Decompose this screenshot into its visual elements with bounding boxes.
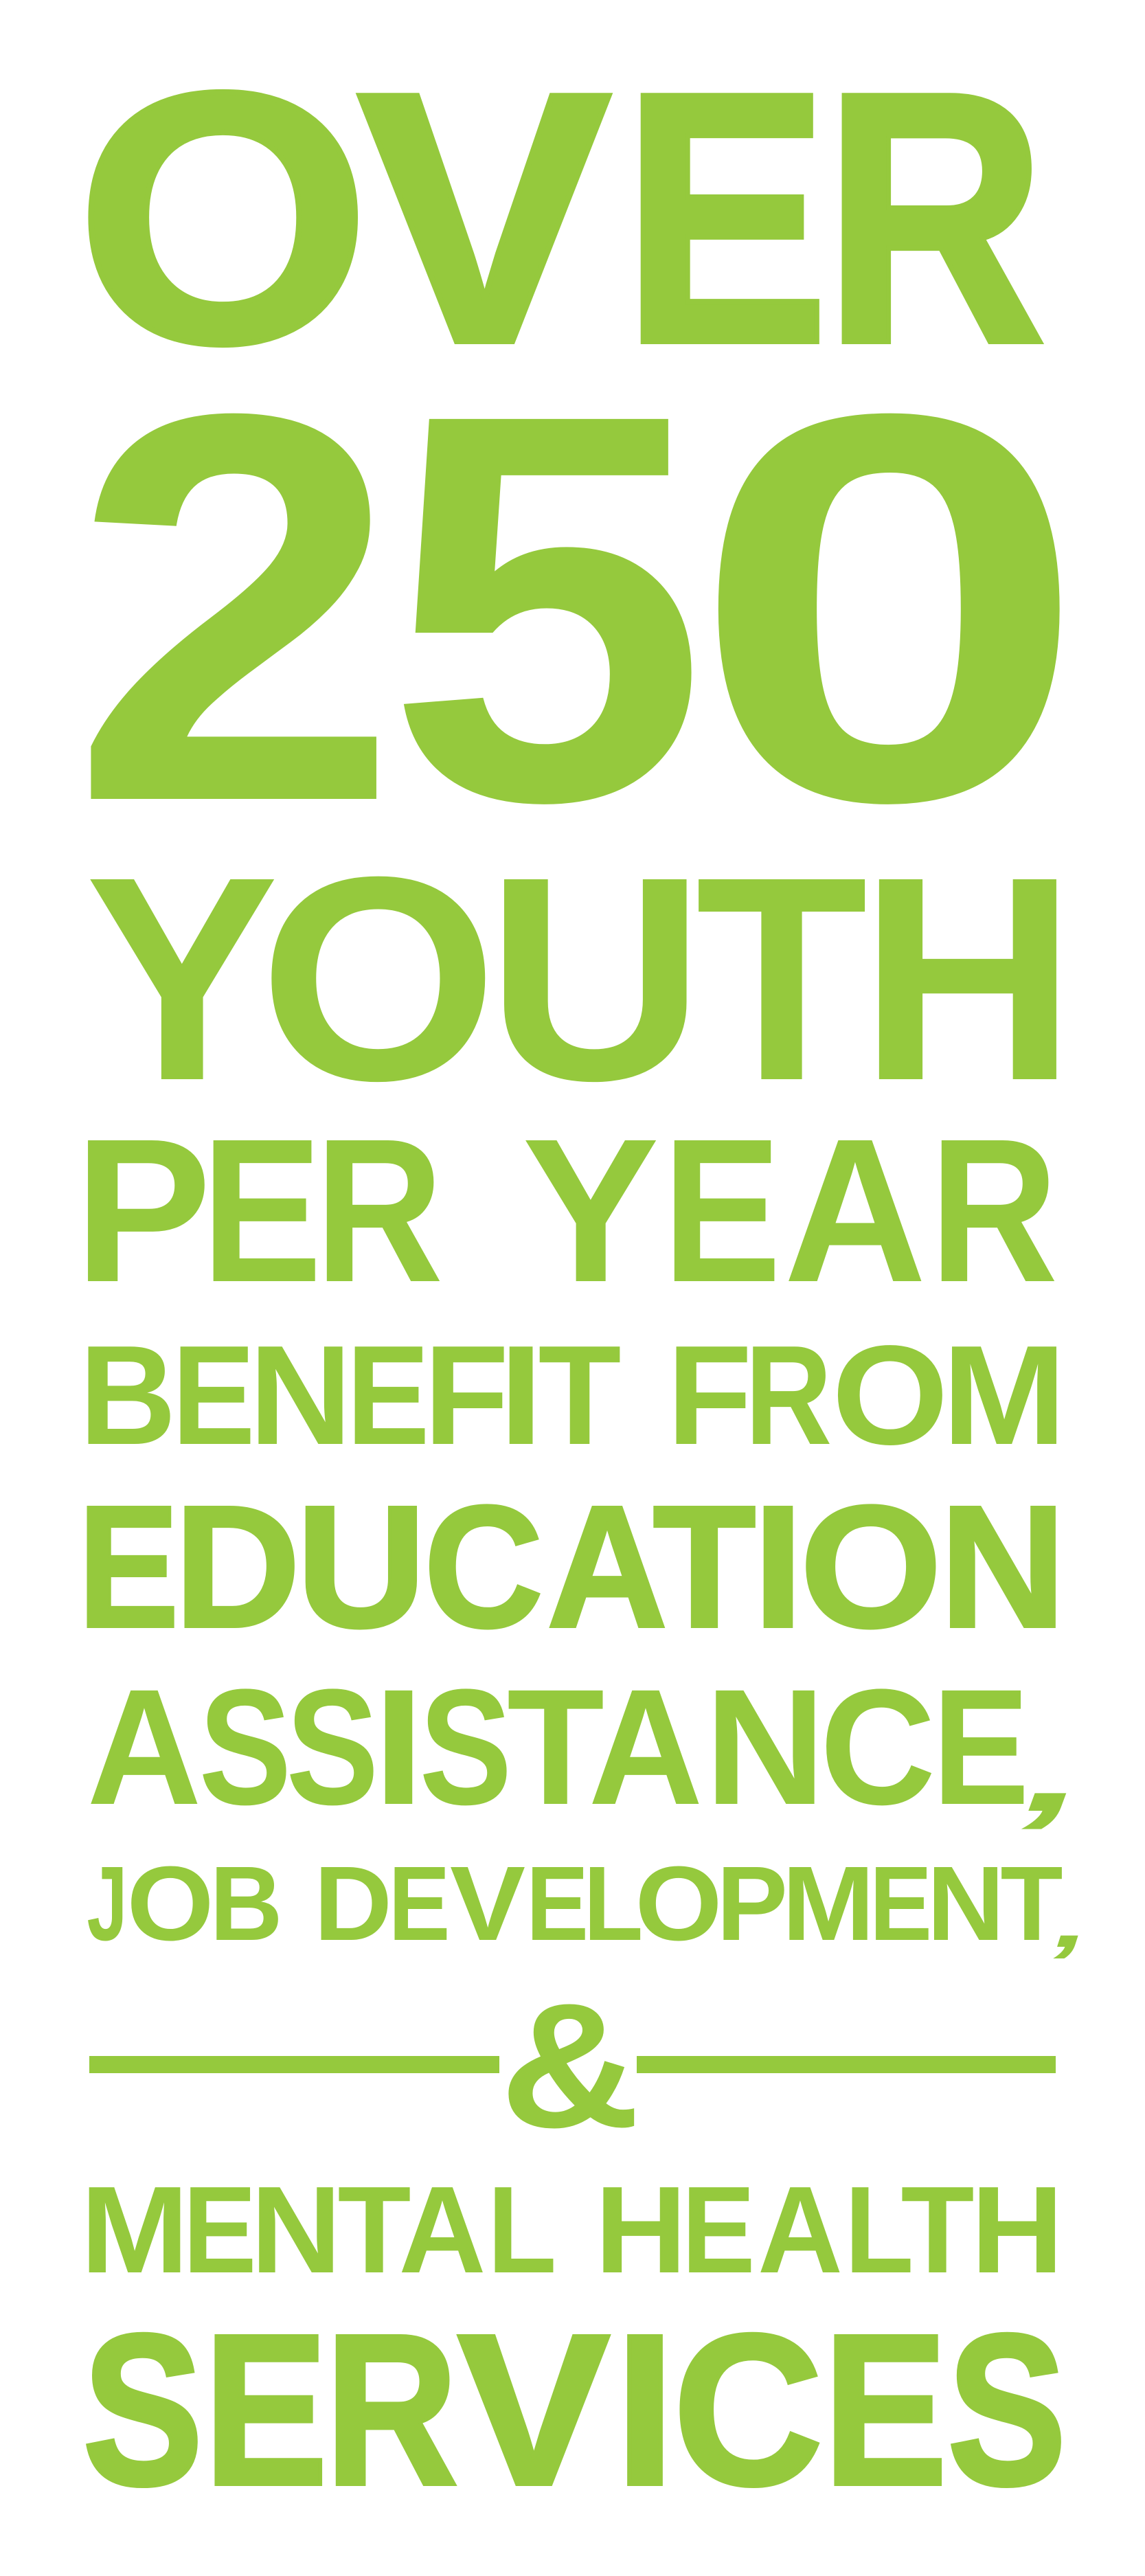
text: JOB DEVELOPMENT: D — [314, 1844, 392, 1963]
text: ASSISTANCE: S — [286, 1655, 379, 1839]
text: ASSISTANCE: , — [1021, 1704, 1085, 1836]
big number: 250: 2 — [70, 300, 400, 916]
text: ASSISTANCE: T — [507, 1655, 604, 1839]
text: EDUCATION: T — [653, 1469, 756, 1664]
text: BENEFIT FROM: M — [942, 1316, 1066, 1474]
text: BENEFIT FROM: F — [667, 1316, 752, 1474]
text: BENEFIT FROM: O — [832, 1316, 949, 1474]
big number: 250: 0 — [690, 300, 1089, 916]
text: EDUCATION: C — [424, 1469, 543, 1664]
heading: SERVICES: S — [948, 2290, 1066, 2530]
heading: OVER: E — [622, 19, 829, 418]
text: ASSISTANCE: C — [820, 1655, 936, 1839]
text: EDUCATION: E — [78, 1469, 179, 1664]
text: JOB DEVELOPMENT: E — [870, 1844, 932, 1963]
text: MENTAL HEALTH: L — [845, 2161, 914, 2299]
text: JOB DEVELOPMENT: E — [526, 1844, 589, 1963]
icon: ampersand: & — [500, 1966, 640, 2165]
divider: right rule — [637, 2056, 1056, 2073]
text: JOB DEVELOPMENT: B — [210, 1844, 283, 1963]
text: EDUCATION: N — [940, 1469, 1066, 1664]
heading: YOUTH: U — [486, 816, 705, 1141]
text: MENTAL HEALTH: M — [80, 2161, 189, 2299]
text: BENEFIT FROM: N — [249, 1316, 352, 1474]
text: ASSISTANCE: S — [419, 1655, 512, 1839]
big number: 250: 5 — [386, 300, 707, 916]
text: ASSISTANCE: N — [705, 1655, 826, 1839]
text: JOB DEVELOPMENT: P — [716, 1844, 788, 1963]
text: ASSISTANCE: A — [87, 1655, 202, 1839]
heading: SERVICES: I — [615, 2290, 675, 2530]
text: JOB DEVELOPMENT: , — [1052, 1879, 1089, 1963]
text: MENTAL HEALTH: A — [758, 2161, 843, 2299]
heading: YOUTH: Y — [85, 816, 279, 1141]
divider: left rule — [89, 2056, 499, 2073]
text: EDUCATION: I — [753, 1469, 804, 1664]
heading: OVER: O — [76, 19, 371, 418]
heading: SERVICES: R — [326, 2290, 457, 2530]
text: BENEFIT FROM: B — [80, 1316, 176, 1474]
text: JOB DEVELOPMENT: O — [126, 1844, 214, 1963]
text: BENEFIT FROM: E — [172, 1316, 256, 1474]
text: MENTAL HEALTH: E — [183, 2161, 257, 2299]
heading: YOUTH: H — [859, 816, 1077, 1141]
text: JOB DEVELOPMENT: T — [1000, 1844, 1063, 1963]
text: MENTAL HEALTH: N — [251, 2161, 341, 2299]
text: JOB DEVELOPMENT: J — [87, 1844, 128, 1963]
text: BENEFIT FROM: R — [745, 1316, 832, 1474]
text: EDUCATION: A — [547, 1469, 668, 1664]
text: BENEFIT FROM: E — [346, 1316, 430, 1474]
text: ASSISTANCE: E — [933, 1655, 1029, 1839]
text: MENTAL HEALTH: T — [901, 2161, 974, 2299]
heading: SERVICES: E — [824, 2290, 947, 2530]
text: PER YEAR: R — [315, 1096, 444, 1325]
text: BENEFIT FROM: F — [424, 1316, 509, 1474]
text: MENTAL HEALTH: A — [398, 2161, 486, 2299]
heading: SERVICES: V — [457, 2290, 611, 2530]
text: EDUCATION: U — [296, 1469, 427, 1664]
text: ASSISTANCE: I — [372, 1655, 424, 1839]
text: EDUCATION: D — [174, 1469, 301, 1664]
text: JOB DEVELOPMENT: M — [782, 1844, 875, 1963]
text: PER YEAR: P — [74, 1096, 212, 1325]
heading: YOUTH: O — [259, 816, 498, 1141]
text: PER YEAR: R — [930, 1096, 1058, 1325]
text: PER YEAR: E — [201, 1096, 322, 1325]
text: PER YEAR: E — [662, 1096, 782, 1325]
text: PER YEAR: A — [784, 1096, 927, 1325]
text: JOB DEVELOPMENT: V — [450, 1844, 525, 1963]
heading: OVER: R — [824, 19, 1046, 418]
text: EDUCATION: O — [800, 1469, 942, 1664]
text: JOB DEVELOPMENT: E — [389, 1844, 451, 1963]
text: MENTAL HEALTH: H — [971, 2161, 1063, 2299]
text: BENEFIT FROM: T — [539, 1316, 621, 1474]
text: ASSISTANCE: S — [199, 1655, 291, 1839]
text: MENTAL HEALTH: E — [681, 2161, 756, 2299]
text: JOB DEVELOPMENT: N — [927, 1844, 1004, 1963]
heading: SERVICES: S — [82, 2290, 203, 2530]
heading: YOUTH: T — [695, 816, 868, 1141]
text: JOB DEVELOPMENT: O — [635, 1844, 723, 1963]
heading: OVER: V — [357, 19, 613, 418]
heading: SERVICES: C — [673, 2290, 823, 2530]
text: ASSISTANCE: A — [588, 1655, 703, 1839]
text: MENTAL HEALTH: H — [595, 2161, 687, 2299]
text: MENTAL HEALTH: T — [338, 2161, 411, 2299]
text: BENEFIT FROM: I — [499, 1316, 543, 1474]
text: JOB DEVELOPMENT: L — [584, 1844, 643, 1963]
text: PER YEAR: Y — [522, 1096, 659, 1325]
heading: SERVICES: E — [204, 2290, 328, 2530]
text: MENTAL HEALTH: L — [488, 2161, 556, 2299]
